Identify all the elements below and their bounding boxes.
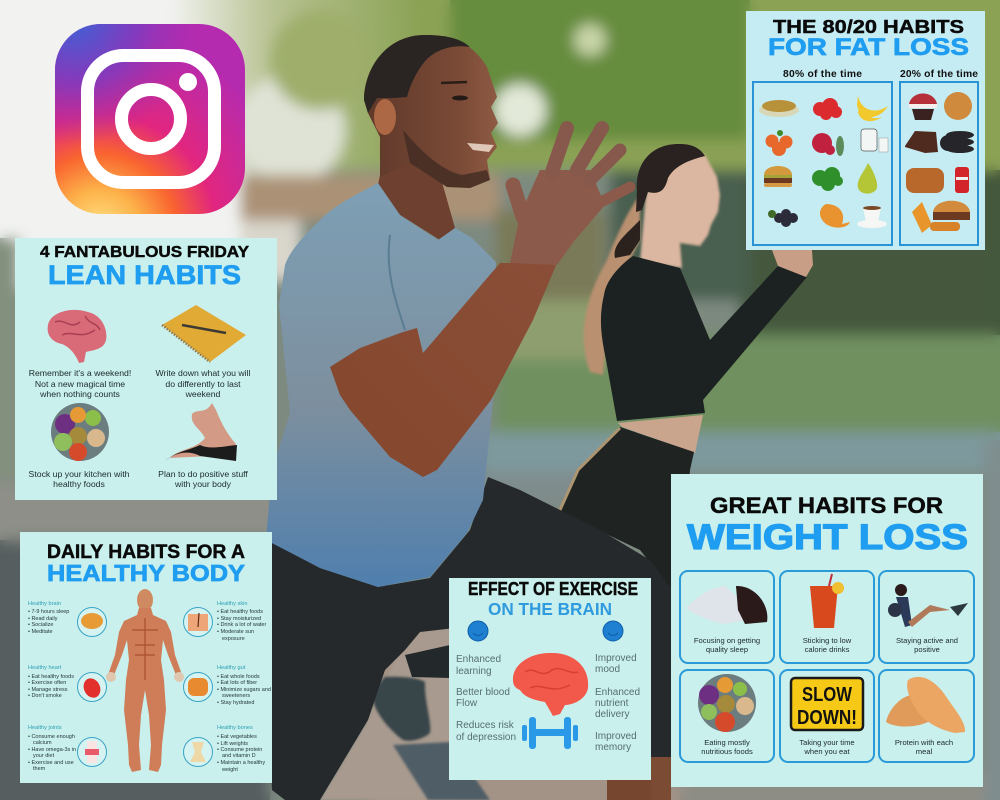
text: left benefits: Flow: [456, 698, 478, 709]
callout: healthy brain: [28, 601, 106, 636]
icon: sandwich cookies: [940, 131, 974, 153]
text: right benefits: Improved: [595, 653, 637, 664]
card: low calorie drinks: Sticking to low: [803, 636, 852, 645]
text: left benefits: Better blood: [456, 687, 510, 698]
woman midriff: [618, 415, 703, 453]
card: nutritious foods: [680, 670, 774, 762]
thumb: [513, 185, 523, 217]
text: left benefits: learning: [456, 666, 492, 677]
icon: salad plate: [759, 100, 799, 117]
card: low calorie drinks: calorie drinks: [805, 645, 850, 654]
icon: burger: [764, 166, 792, 187]
callout: healthy bones: Healthy bones: [217, 725, 253, 731]
callout: healthy heart: • Manage stress: [28, 687, 68, 693]
heading: GREAT HABITS FOR: [710, 493, 943, 518]
callout: healthy skin: • Stay moisturized: [217, 616, 261, 622]
panel: effect of exercise on the brain: [449, 578, 651, 780]
card: quality sleep: Focusing on getting: [694, 636, 760, 645]
text: right benefits: Improved: [595, 731, 637, 742]
icon: melon: [820, 204, 850, 228]
box: 80 percent foods: [753, 82, 892, 245]
text: remember weekend: Not a new magical time: [35, 379, 125, 389]
text: stock up: Stock up your kitchen with: [29, 469, 130, 479]
box: 20 percent foods: [900, 82, 978, 245]
text: remember weekend: when nothing counts: [39, 389, 120, 399]
icon: brain: [48, 310, 106, 363]
callout: healthy bones: • Lift weights: [217, 741, 248, 747]
callout: healthy joints: calcium: [33, 740, 52, 746]
callout: healthy bones: • Eat vegetables: [217, 734, 257, 740]
panel: daily habits for a healthy body: [20, 532, 272, 783]
label: 80 percent: 80% of the time: [783, 69, 862, 80]
woman ponytail dark: [615, 220, 640, 258]
callout: healthy brain: • Read daily: [28, 616, 58, 622]
callout: healthy skin: • Drink a lot of water: [217, 622, 266, 628]
subheading: HEALTHY BODY: [47, 560, 245, 586]
icon: healthy food bowl: [51, 403, 109, 461]
card: quality sleep: [680, 571, 774, 663]
road shadow: [393, 742, 490, 800]
heading: 4 FANTABULOUS FRIDAY: [40, 244, 249, 261]
callout: healthy joints: them: [33, 766, 46, 772]
card: quality sleep: quality sleep: [706, 645, 748, 654]
neck: [378, 150, 455, 240]
callout: healthy brain: • 7-9 hours sleep: [28, 609, 69, 615]
callout: healthy joints: Healthy joints: [28, 725, 62, 731]
icon: smiley right: [603, 621, 623, 641]
text: left benefits: Reduces risk: [456, 720, 515, 731]
callout: healthy skin: [184, 601, 266, 642]
rear leg sock: [405, 645, 450, 678]
ear: [374, 99, 396, 135]
text: plan: Plan to do positive stuff: [158, 469, 248, 479]
card: active and positive: [879, 571, 974, 663]
hand right: [174, 672, 184, 682]
card: protein with each meal: Protein with each: [895, 738, 953, 747]
front knee skin: [651, 757, 671, 800]
icon: smiley left: [468, 621, 488, 641]
card: low calorie drinks: [780, 571, 874, 663]
callout: healthy joints: • Have omega-3s in: [28, 747, 76, 753]
eye: [452, 96, 468, 100]
hand left: [106, 672, 116, 682]
woman ponytail: [584, 195, 640, 375]
callout: healthy joints: [28, 725, 106, 772]
callout: healthy gut: Healthy gut: [217, 665, 246, 671]
illustration: muscular body: [106, 589, 184, 772]
icon: cupcake: [909, 94, 937, 120]
little finger: [595, 187, 630, 205]
callout: healthy gut: • Minimize sugars and: [217, 687, 271, 693]
card: take your time: DOWN!: [797, 707, 857, 729]
subheading: FOR FAT LOSS: [768, 34, 969, 61]
icon: instagram logo: [55, 24, 245, 214]
icon: yoga pose: [165, 403, 237, 461]
callout: healthy brain: • Meditate: [28, 629, 53, 635]
text: right benefits: Enhanced: [595, 687, 640, 698]
subheading: LEAN HABITS: [48, 260, 241, 290]
text: write down: weekend: [185, 389, 221, 399]
callout: healthy gut: sweeteners: [222, 693, 250, 699]
callout: healthy skin: Healthy skin: [217, 601, 247, 607]
index finger: [552, 128, 567, 172]
icon: peaches: [766, 130, 792, 156]
rear shoe: [373, 677, 430, 741]
icon: bananas: [857, 95, 888, 121]
text: left benefits: Enhanced: [456, 654, 501, 665]
icon: pear: [858, 163, 877, 194]
ring finger: [590, 150, 620, 180]
callout: healthy bones: • Maintain a healthy: [217, 760, 265, 766]
palm: [510, 170, 605, 265]
card: active and positive: positive: [914, 645, 940, 654]
card: nutritious foods: Eating mostly: [704, 738, 750, 747]
text: write down: do differently to last: [165, 379, 241, 389]
callout: healthy joints: • Exercise and use: [28, 760, 74, 766]
callout: healthy heart: • Eat healthy foods: [28, 674, 74, 680]
icon: fries and burger: [912, 201, 970, 233]
text: right benefits: memory: [595, 742, 631, 753]
woman runner: [560, 144, 813, 600]
panel: 4 fantabulous friday lean habits: [15, 238, 277, 500]
icon: dumbbell: [522, 717, 578, 749]
subheading: ON THE BRAIN: [488, 599, 612, 619]
woman pants: [560, 427, 694, 600]
panel: the 80/20 habits for fat loss: [746, 11, 985, 250]
heading: DAILY HABITS FOR A: [47, 541, 245, 563]
callout: healthy heart: • Don't smoke: [28, 693, 62, 699]
shorts: [266, 477, 672, 800]
woman cropped top: [601, 256, 807, 421]
callout: healthy skin: exposure: [222, 636, 245, 642]
woman face and neck: [640, 146, 720, 268]
callout: healthy bones: weight: [221, 767, 238, 773]
subheading: WEIGHT LOSS: [687, 518, 968, 557]
callout: healthy joints: your diet: [33, 753, 55, 759]
callout: healthy bones: • Consume protein: [217, 747, 262, 753]
callout: healthy brain: Healthy brain: [28, 601, 61, 607]
middle finger: [577, 128, 602, 170]
heading: THE 80/20 HABITS: [773, 16, 964, 37]
head: [364, 35, 498, 188]
icons: healthy foods: [759, 95, 888, 228]
text: remember weekend: Remember it's a weekend!: [29, 368, 131, 378]
callout: healthy heart: Healthy heart: [28, 665, 62, 671]
icon: brain: [513, 653, 588, 716]
woman pants edge: [560, 428, 620, 510]
icon: chocolate: [905, 131, 938, 153]
card: take your time: [780, 670, 874, 762]
icon: raspberries: [812, 133, 844, 156]
text: stock up: healthy foods: [53, 479, 105, 489]
text: right benefits: delivery: [595, 709, 629, 720]
beard: [403, 130, 490, 188]
road surface: [320, 628, 455, 800]
icon: cookie: [944, 92, 972, 120]
card: protein with each meal: [879, 670, 974, 762]
callout: healthy bones: [184, 725, 265, 773]
text: left benefits: of depression: [456, 732, 516, 743]
callout: healthy gut: • Eat lots of fiber: [217, 680, 257, 686]
icon: notebook and pen: [162, 305, 246, 362]
card: nutritious foods: nutritious foods: [701, 747, 753, 756]
icon: fried food: [906, 168, 944, 193]
icon: lettuce: [812, 167, 843, 191]
callout: healthy skin: • Eat healthy foods: [217, 609, 263, 615]
panel: great habits for weight loss: [671, 474, 983, 787]
callout: healthy skin: • Moderate sun: [217, 629, 254, 635]
label: 20 percent: 20% of the time: [900, 69, 978, 80]
callout: healthy gut: [184, 665, 271, 706]
text: right benefits: mood: [595, 664, 620, 675]
woman hair: [636, 144, 705, 212]
sleeve seam: [389, 235, 405, 330]
icons: treat foods: [905, 92, 974, 233]
callout: healthy heart: [28, 665, 106, 702]
callout: healthy joints: • Consume enough: [28, 734, 75, 740]
front lower leg: [607, 780, 651, 800]
callout: healthy bones: and vitamin D: [222, 753, 256, 759]
heading: EFFECT OF EXERCISE: [468, 579, 638, 599]
icon: grapes: [768, 209, 798, 227]
icon: cola can: [955, 167, 969, 193]
woman hand: [772, 250, 813, 277]
card: protein with each meal: meal: [916, 747, 933, 756]
card: take your time: when you eat: [803, 747, 850, 756]
card: active and positive: Staying active and: [896, 636, 958, 645]
hair: [364, 35, 470, 113]
forearm and upper arm: [330, 263, 557, 477]
mouth: [467, 143, 494, 152]
card: take your time: SLOW: [802, 684, 852, 706]
callout: healthy heart: • Exercise often: [28, 680, 66, 686]
t-shirt: [266, 183, 496, 587]
eyebrow: [441, 82, 467, 83]
hand: [510, 128, 630, 265]
callout: healthy brain: • Socialize: [28, 622, 53, 628]
icon: coffee cup: [857, 206, 887, 228]
icon: milk jug and glass: [861, 129, 888, 152]
text: right benefits: nutrient: [595, 698, 629, 709]
text: plan: with your body: [174, 479, 232, 489]
callout: healthy gut: • Eat whole foods: [217, 674, 260, 680]
abdomen detail: [132, 618, 158, 680]
callout: healthy gut: • Stay hydrated: [217, 700, 254, 706]
text: write down: Write down what you will: [156, 368, 251, 378]
man runner: [266, 35, 672, 800]
icon: strawberries: [813, 98, 842, 120]
card: take your time: Taking your time: [799, 738, 855, 747]
